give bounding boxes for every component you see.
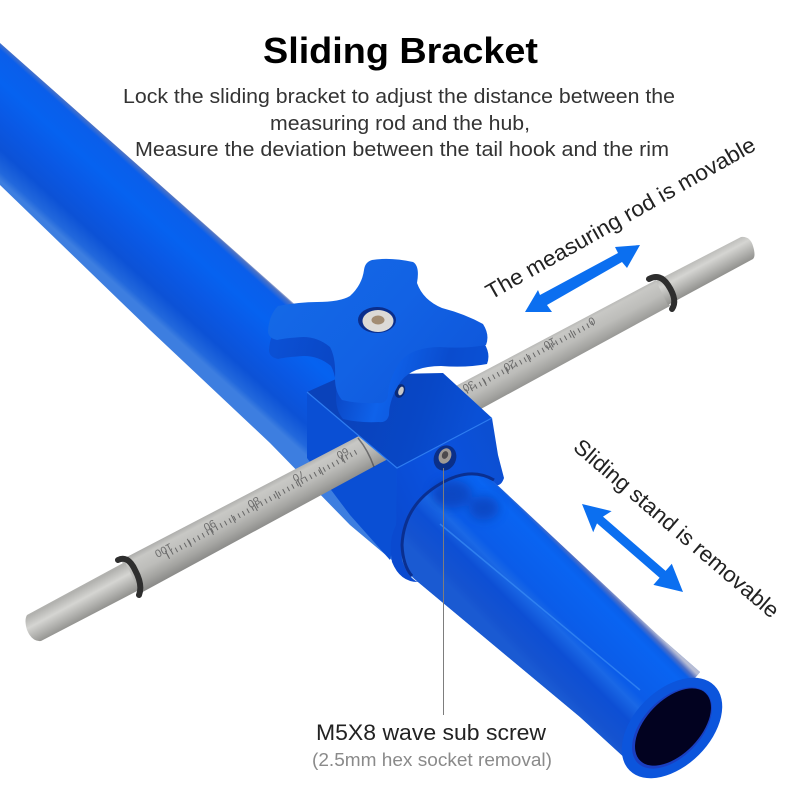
block top face xyxy=(307,373,492,468)
label: measuring rod movable: The measuring rod is movable xyxy=(481,132,760,304)
scale numbers: 80 xyxy=(245,493,262,510)
scale numbers: 30 xyxy=(460,377,477,394)
four-lobe knob xyxy=(268,259,488,422)
description text: measuring rod and the hub, xyxy=(270,113,530,135)
rod shadow at block entry xyxy=(358,438,374,467)
block top edge highlight xyxy=(307,392,492,468)
description text: Lock the sliding bracket to adjust the distance between the xyxy=(123,86,675,108)
block right face and collar xyxy=(391,418,504,582)
left O-ring xyxy=(118,559,140,595)
small screw under knob xyxy=(393,383,407,399)
front section of tube emerging from collar xyxy=(402,474,700,760)
scale numbers: 60 xyxy=(334,444,351,461)
right O-ring xyxy=(649,277,674,309)
description text: Measure the deviation between the tail hook and the rim xyxy=(135,139,669,161)
scale numbers: 70 xyxy=(290,467,307,484)
rod left thin end xyxy=(26,562,139,641)
shadow under bracket xyxy=(432,480,499,520)
rod right thin end xyxy=(656,237,754,305)
description text xyxy=(123,86,675,161)
arrow: sliding stand removable xyxy=(582,504,683,592)
tube highlight streak xyxy=(440,524,640,690)
blue main tube, rear section xyxy=(0,43,700,760)
rod main shaft xyxy=(121,280,670,594)
scale numbers: 20 xyxy=(501,356,518,373)
scale numbers xyxy=(152,314,597,559)
steel measuring rod with scale xyxy=(26,237,754,641)
title: Sliding Bracket xyxy=(263,30,538,71)
scale numbers: 0 xyxy=(586,314,597,327)
inner rim xyxy=(617,673,727,783)
dark bore xyxy=(621,674,725,780)
label: sliding stand removable: Sliding stand is removable xyxy=(569,434,784,623)
tube open end xyxy=(603,659,741,797)
arrow: measuring rod movable xyxy=(525,245,640,312)
scale numbers: 90 xyxy=(201,516,218,533)
callout leader line xyxy=(442,468,444,715)
end rim xyxy=(603,659,741,797)
sliding bracket block xyxy=(307,373,504,582)
scale numbers: 10 xyxy=(541,334,558,351)
label: removal note: (2.5mm hex socket removal) xyxy=(312,750,552,770)
hex set screw on block xyxy=(430,442,460,474)
label: screw name: M5X8 wave sub screw xyxy=(316,720,546,745)
block left face behind rod xyxy=(307,392,397,560)
scale numbers: 100 xyxy=(152,540,174,559)
knob side wall xyxy=(269,278,488,422)
knob top face xyxy=(268,259,487,403)
scale ticks xyxy=(167,323,593,555)
knob centre screw xyxy=(358,307,396,333)
collar gap shadow xyxy=(402,474,494,576)
